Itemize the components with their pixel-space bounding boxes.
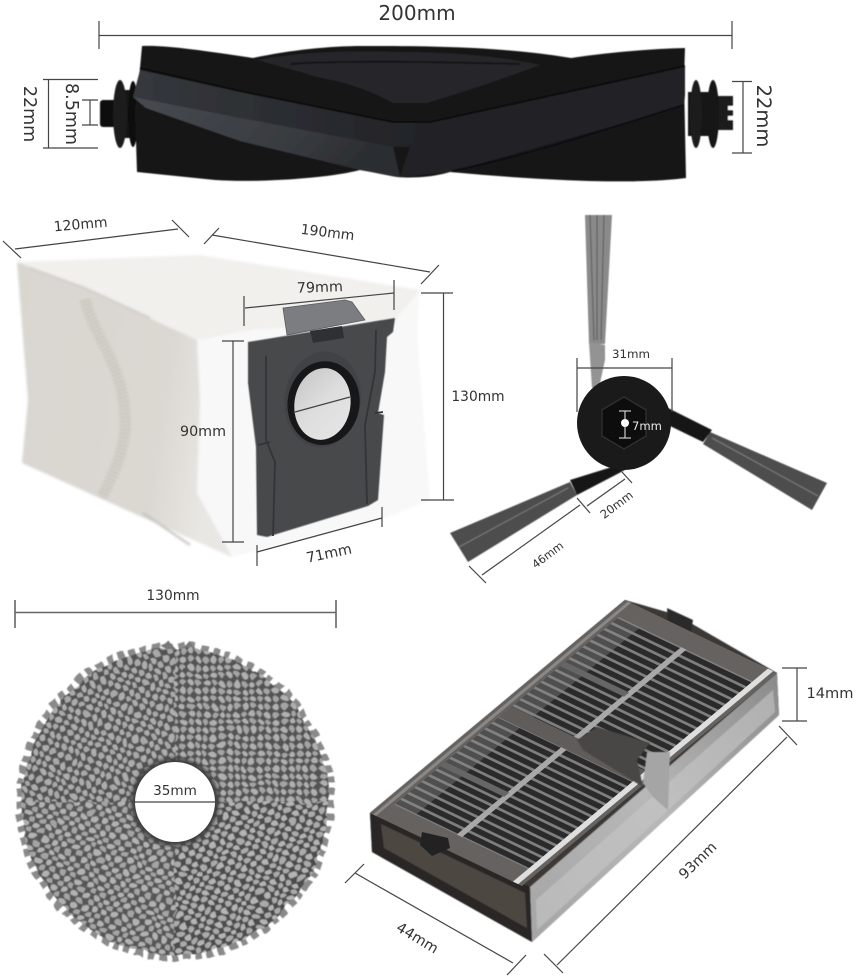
roller body — [135, 46, 686, 181]
dimension: 130mm height: 130mm — [451, 389, 505, 405]
dimension: 22mm left: 22mm — [19, 86, 39, 142]
dimension: 35mm: 35mm — [153, 783, 197, 799]
dimension: 7mm bore: 7mm — [632, 419, 662, 433]
dimension: 22mm right: 22mm — [752, 85, 775, 147]
dimension: 14mm — [782, 668, 854, 721]
dimension: 90mm — [180, 341, 244, 542]
mop pad centre hole — [131, 758, 219, 846]
dimension: 46mm — [469, 505, 580, 583]
dimension: 120mm: 120mm — [53, 215, 108, 235]
dimension: 20mm — [577, 472, 636, 522]
dimension: 31mm — [577, 347, 672, 412]
dimension: 8.5mm shaft: 8.5mm — [61, 83, 81, 145]
dimension: 71mm — [257, 507, 382, 567]
bag tab — [283, 300, 365, 335]
filter corner clip — [420, 832, 450, 856]
dimension: 120mm — [3, 215, 189, 258]
dimension: 90mm: 90mm — [180, 424, 226, 440]
panel: HEPA filter — [345, 600, 854, 975]
dimension: 8.5mm shaft — [61, 83, 98, 145]
dimension: 71mm: 71mm — [305, 541, 353, 567]
panel: mop pad — [10, 588, 340, 965]
dimension: ring line — [295, 397, 350, 412]
dimension: 130mm width — [15, 588, 336, 628]
plate grooves — [258, 330, 383, 536]
right axle — [688, 80, 734, 148]
dimension: 190mm: 190mm — [300, 222, 355, 244]
dimension: 93mm — [544, 726, 797, 973]
dimension: 79mm: 79mm — [297, 279, 343, 297]
right bristle arm — [668, 408, 827, 510]
left bristle arm — [450, 466, 625, 562]
top bristle arm — [585, 215, 612, 388]
dimension: 79mm — [244, 279, 394, 326]
dimension: 22mm left — [19, 80, 98, 148]
left axle — [100, 80, 140, 148]
dimension: 130mm width: 130mm — [146, 588, 200, 604]
plate ring with lens — [278, 347, 367, 452]
dimension: 35mm — [135, 783, 215, 802]
mop pad fibres — [10, 640, 340, 965]
dimension: 7mm bore — [619, 411, 662, 438]
dimension: 130mm height — [421, 293, 505, 500]
dimension: 44mm: 44mm — [393, 920, 441, 957]
dimension: 200mm length: 200mm — [378, 1, 456, 25]
dimension: 200mm length — [99, 1, 732, 49]
dimension: 44mm — [345, 864, 526, 975]
dimension: 31mm: 31mm — [612, 347, 650, 361]
dimension: 190mm — [204, 222, 439, 284]
filter case — [370, 600, 779, 942]
plate latch — [310, 326, 344, 343]
bag plate — [248, 318, 395, 537]
filter top with slats — [370, 600, 777, 886]
filter centre latch — [577, 727, 670, 810]
roller brush photo — [100, 46, 734, 181]
dimension: 46mm: 46mm — [530, 539, 566, 571]
dimension: 14mm: 14mm — [806, 685, 854, 702]
panel: main roller brush — [19, 1, 775, 181]
dimension: 22mm right — [732, 82, 775, 153]
panel: dust bag — [3, 215, 505, 567]
brush hub — [577, 376, 671, 470]
dimension: 20mm: 20mm — [597, 488, 636, 522]
dust bag body — [17, 255, 430, 557]
panel: side brush — [450, 215, 827, 583]
dimension: 93mm: 93mm — [676, 839, 720, 883]
